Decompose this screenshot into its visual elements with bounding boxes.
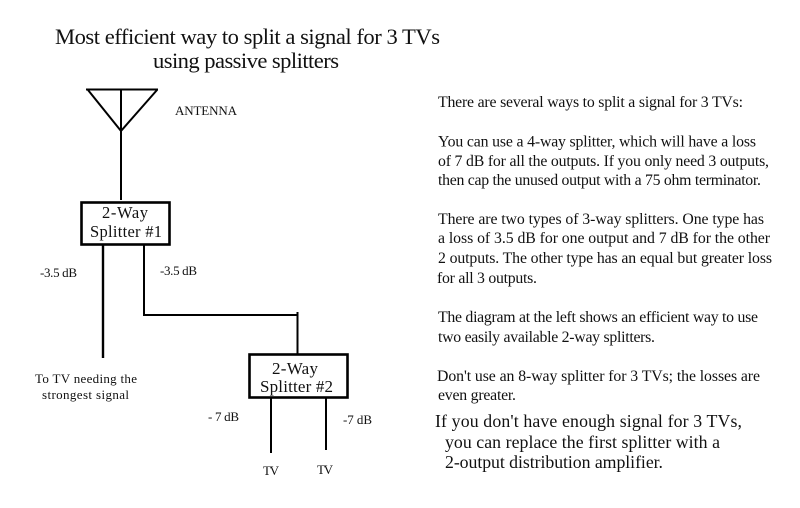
title xyxy=(55,24,440,73)
text: 4-way splitter: You can use a 4-way splitter, which will have a loss xyxy=(438,134,756,150)
loss label: second output: -3.5 dB xyxy=(160,263,197,278)
text: 3-way splitters xyxy=(437,211,772,287)
TV output lines xyxy=(271,398,326,453)
icon: antenna xyxy=(86,89,158,200)
splitter 2 box xyxy=(250,354,348,398)
text: intro: There are several ways to split a signal for 3 TVs: xyxy=(438,94,743,111)
text: diagram note: two easily available 2-way splitters. xyxy=(438,329,655,346)
title: using passive splitters xyxy=(153,48,339,73)
splitter 2 box: 2-Way xyxy=(272,359,318,378)
text: distribution amplifier tip: If you don't have enough signal for 3 TVs, xyxy=(435,411,742,431)
loss label: TV 2: -7 dB xyxy=(343,412,372,427)
loss label: first output: -3.5 dB xyxy=(40,265,77,280)
label: TV needing strongest signal: To TV needing the xyxy=(35,371,137,386)
splitter 2 box: Splitter #2 xyxy=(260,377,333,396)
text: 4-way splitter xyxy=(438,134,769,189)
title: Most efficient way to split a signal for 3 TVs xyxy=(55,24,440,49)
text: 4-way splitter: of 7 dB for all the outputs. If you only need 3 outputs, xyxy=(438,153,769,170)
text: distribution amplifier tip xyxy=(435,411,742,472)
text: distribution amplifier tip: you can replace the first splitter with a xyxy=(445,432,720,452)
text: 4-way splitter: then cap the unused output with a 75 ohm terminator. xyxy=(438,172,761,189)
text: diagram note: The diagram at the left shows an efficient way to use xyxy=(438,309,758,326)
text: 3-way splitters: a loss of 3.5 dB for one output and 7 dB for the other xyxy=(438,230,771,247)
TV label 2: TV xyxy=(317,462,334,477)
label: TV needing strongest signal xyxy=(35,371,137,402)
text: 8-way warning xyxy=(437,368,760,404)
line to splitter 2 xyxy=(143,245,298,355)
loss label: TV 1: - 7 dB xyxy=(208,409,239,424)
splitter 1 box xyxy=(82,202,170,244)
text: 3-way splitters: 2 outputs. The other type has an equal but greater loss xyxy=(438,250,772,267)
text: 3-way splitters: There are two types of 3-way splitters. One type has xyxy=(438,211,764,228)
splitter 1 box: Splitter #1 xyxy=(90,222,162,241)
text: diagram note xyxy=(438,309,758,346)
text: 8-way warning: Don't use an 8-way splitter for 3 TVs; the losses are xyxy=(437,368,760,385)
TV label 1: TV xyxy=(263,463,280,478)
antenna label: ANTENNA xyxy=(175,103,238,118)
splitter 1 box: 2-Way xyxy=(102,203,149,222)
text: distribution amplifier tip: 2-output distribution amplifier. xyxy=(445,452,663,472)
line to strongest TV xyxy=(102,244,104,358)
text: 3-way splitters: for all 3 outputs. xyxy=(437,270,537,287)
text: 8-way warning: even greater. xyxy=(438,387,516,404)
label: TV needing strongest signal: strongest signal xyxy=(42,387,129,402)
